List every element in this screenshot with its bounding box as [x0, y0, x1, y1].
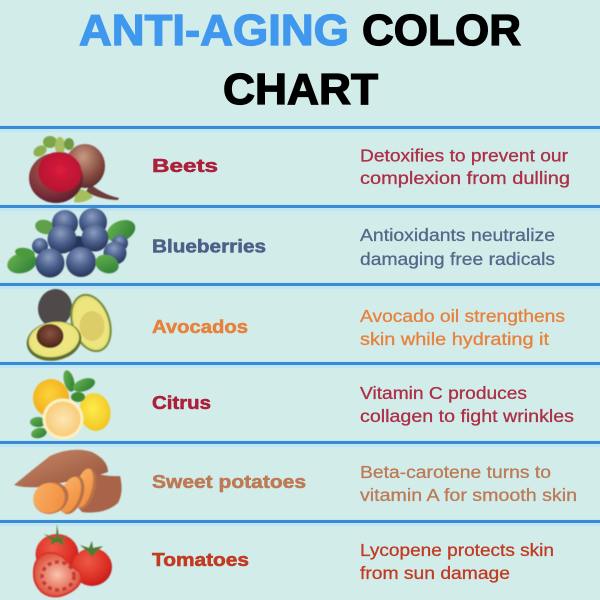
row label: Sweet potatoes: Sweet potatoes — [152, 471, 306, 492]
row label: Beets: Beets — [152, 155, 218, 176]
row label: Tomatoes: Tomatoes — [152, 549, 249, 570]
title: ANTI-AGING — [79, 6, 349, 55]
description: Tomatoes — [360, 540, 554, 583]
description: Beets — [360, 146, 570, 188]
description: Tomatoes: Lycopene protects skin — [360, 540, 554, 560]
description: Beets: complexion from dulling — [360, 168, 570, 188]
description: Sweet potatoes: Beta-carotene turns to — [360, 462, 551, 482]
icon: citrus — [30, 369, 114, 440]
icon: beets — [29, 136, 119, 203]
title: CHART — [223, 65, 378, 114]
description: Sweet potatoes: vitamin A for smooth skin — [360, 485, 577, 505]
description: Beets: Detoxifies to prevent our — [360, 146, 568, 166]
description: Sweet potatoes — [360, 462, 577, 505]
description: Avocados: skin while hydrating it — [360, 329, 549, 349]
row label: Blueberries: Blueberries — [152, 236, 266, 256]
icon: tomatoes — [34, 524, 112, 596]
description: Blueberries: damaging free radicals — [360, 249, 555, 269]
description: Tomatoes: from sun damage — [360, 563, 510, 583]
description: Citrus: collagen to fight wrinkles — [360, 406, 574, 426]
description: Blueberries — [360, 225, 555, 269]
icon: blueberries — [5, 208, 139, 278]
description: Avocados — [360, 306, 565, 349]
description: Citrus: Vitamin C produces — [360, 383, 527, 403]
title — [79, 6, 521, 114]
icon: sweet potatoes — [14, 450, 122, 520]
description: Avocados: Avocado oil strengthens — [360, 306, 565, 326]
title: COLOR — [362, 6, 521, 55]
description: Blueberries: Antioxidants neutralize — [360, 225, 555, 245]
row label: Avocados: Avocados — [152, 316, 248, 337]
description: Citrus — [360, 383, 574, 426]
icon: avocados — [24, 286, 119, 365]
row label: Citrus: Citrus — [152, 392, 211, 413]
